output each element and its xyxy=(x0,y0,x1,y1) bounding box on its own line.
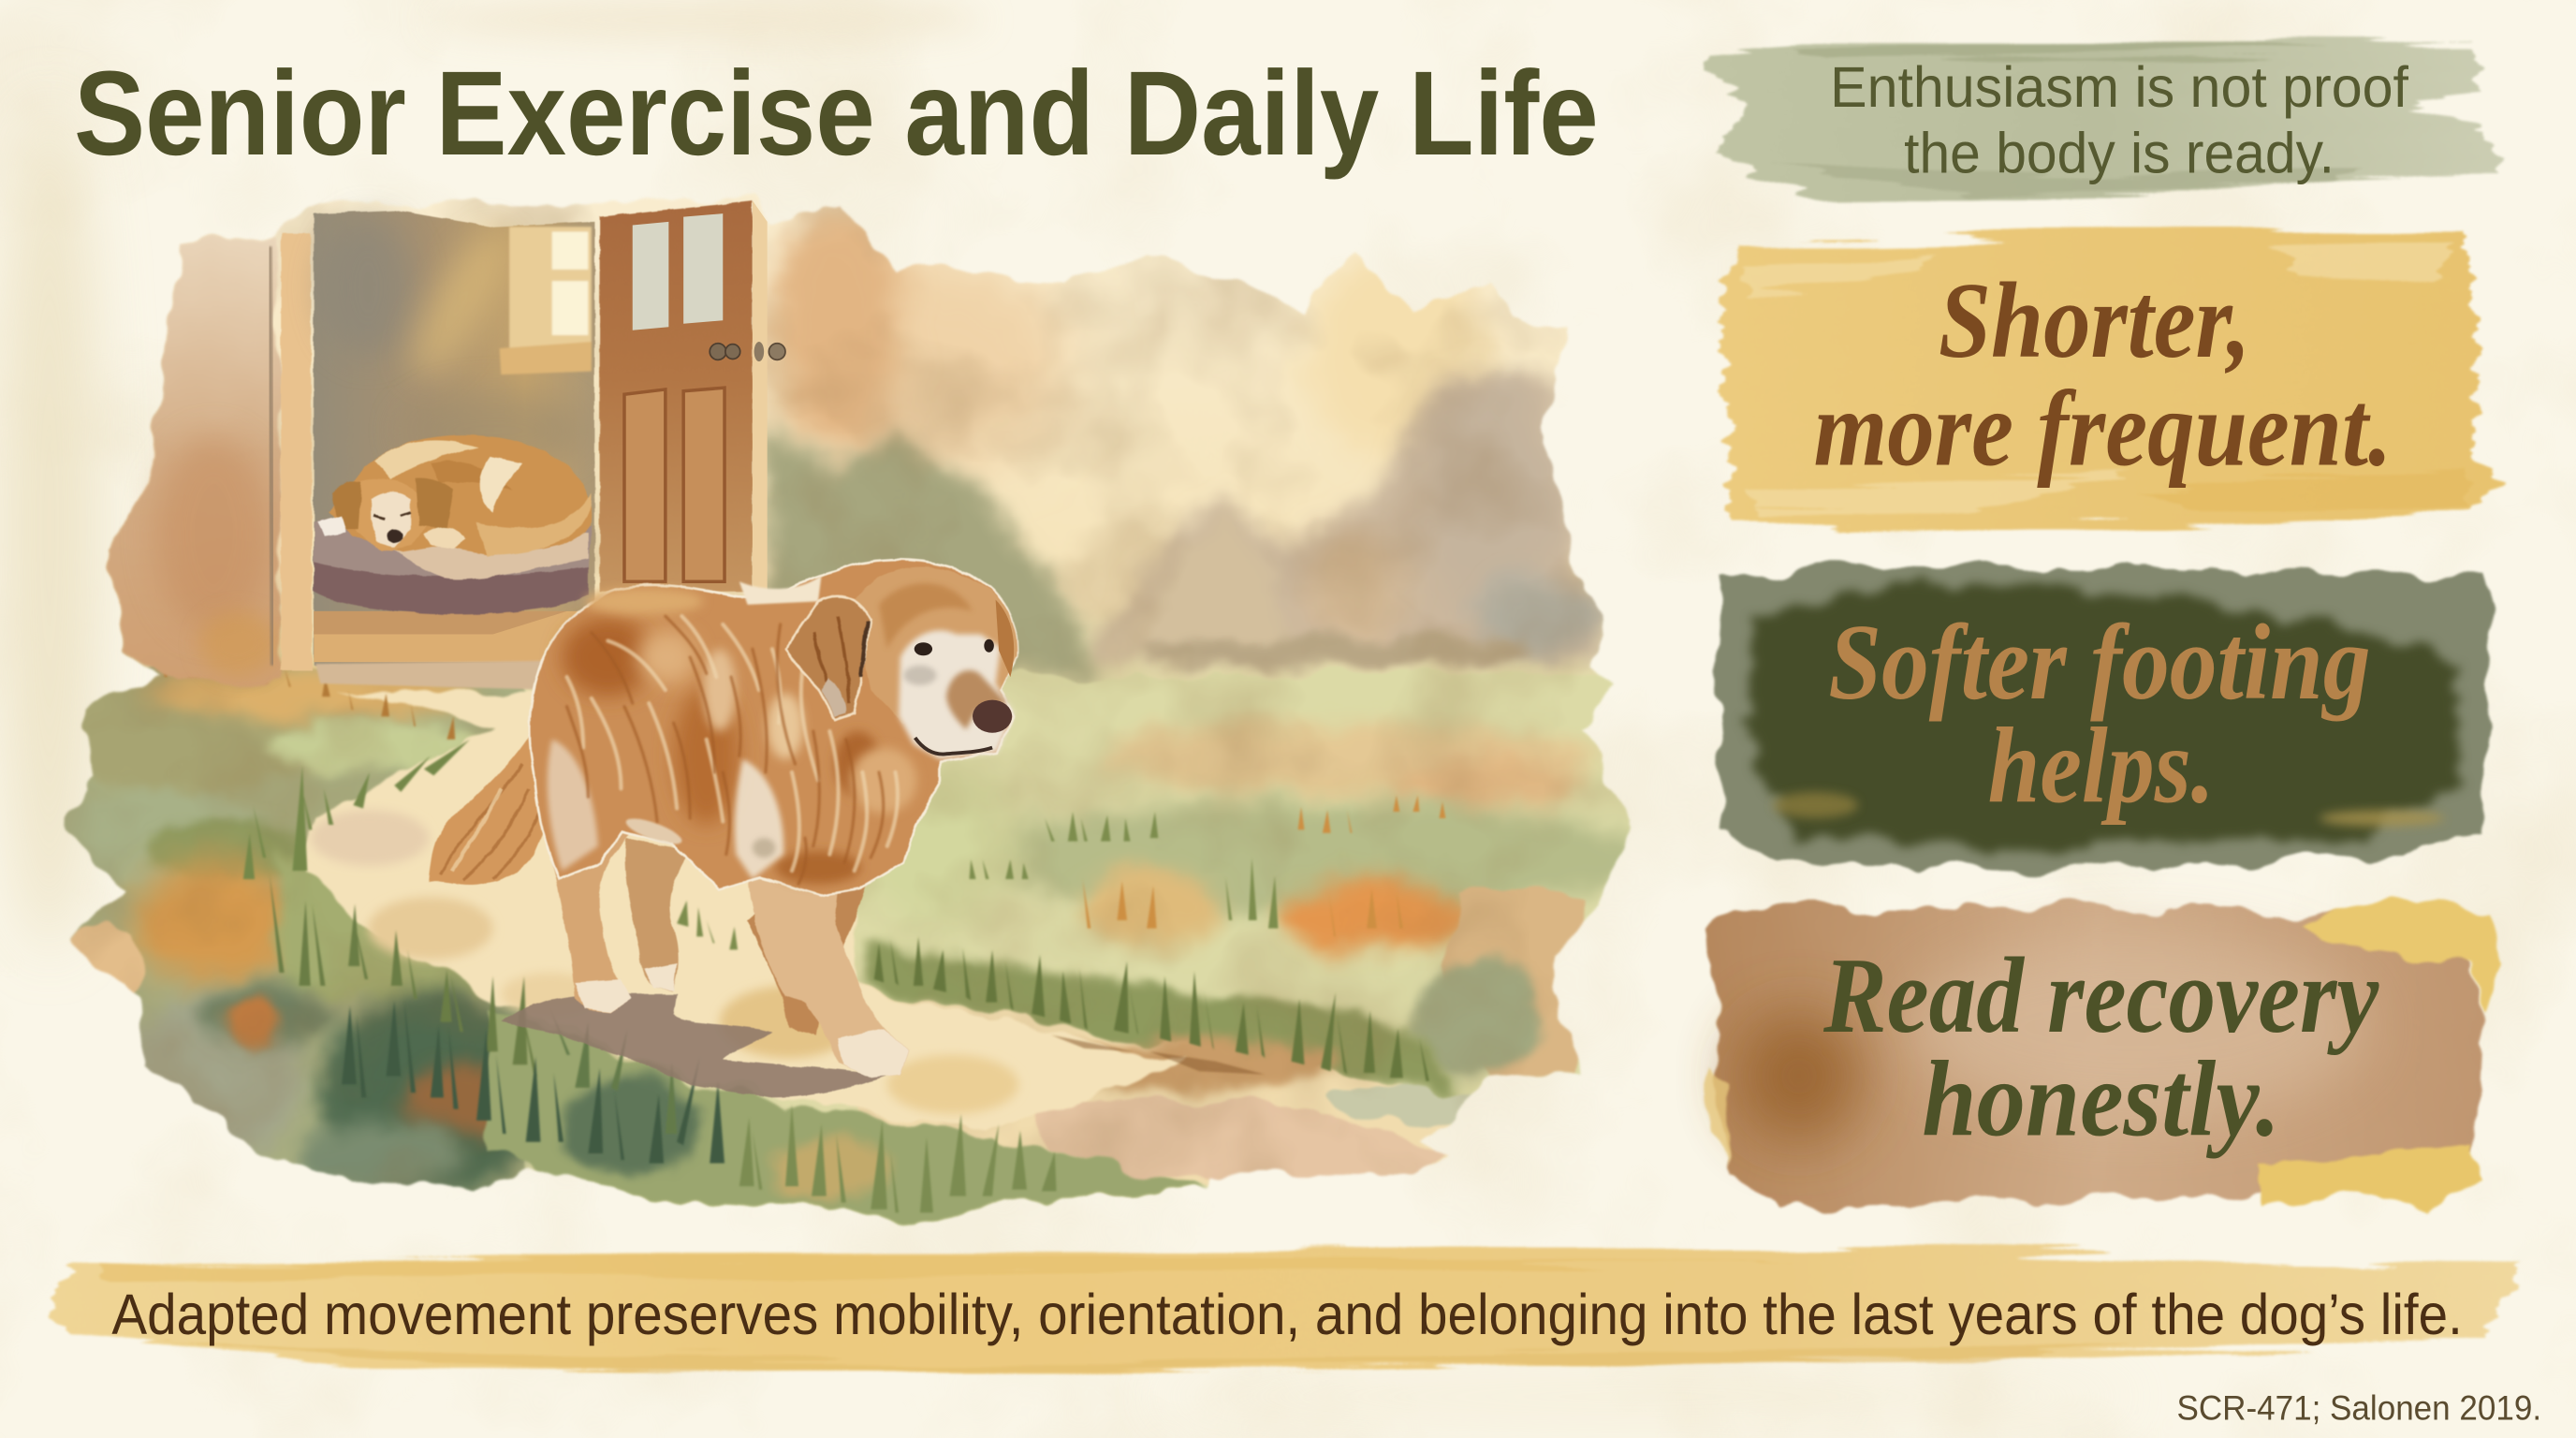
near front leg xyxy=(748,855,909,1077)
ochre wash xyxy=(1721,230,2500,529)
ear xyxy=(785,596,871,720)
title: Senior Exercise and Daily Life xyxy=(74,47,1599,181)
panel: enthusiasm note: the body is ready. xyxy=(1904,121,2334,185)
panel: softer footing helps xyxy=(1717,562,2489,871)
panel: enthusiasm note xyxy=(1701,43,2505,200)
eyes xyxy=(915,642,932,655)
watercolor landscape wash xyxy=(50,181,1651,1232)
room interior xyxy=(314,211,594,666)
green wash xyxy=(1717,562,2489,871)
dark core xyxy=(1745,579,2461,848)
sleeping dog xyxy=(317,435,592,555)
takeaway banner xyxy=(46,1249,2522,1372)
nose xyxy=(973,700,1012,733)
door glass xyxy=(633,213,723,330)
tail xyxy=(429,731,555,885)
hedge xyxy=(764,419,1104,677)
grass blades xyxy=(159,634,1445,1212)
room window xyxy=(500,227,592,374)
sage brush strokes xyxy=(1701,43,2505,200)
ochre brush stroke xyxy=(46,1249,2522,1372)
fur light streaks xyxy=(567,616,898,871)
door knobs xyxy=(710,342,785,361)
door frame xyxy=(281,233,313,670)
pale wash centre xyxy=(1906,936,2365,1117)
panel: read recovery honestly: honestly. xyxy=(1922,1040,2280,1160)
wooden door xyxy=(600,200,785,592)
left bank xyxy=(50,666,526,1208)
paws xyxy=(575,962,909,1078)
text: Shorter, xyxy=(1939,261,2250,381)
dark bloom xyxy=(1736,1010,1862,1142)
body xyxy=(530,560,1017,895)
standing golden retriever xyxy=(429,560,1017,1078)
panel: shorter, more frequent: more frequent. xyxy=(1814,370,2392,490)
cast shadow xyxy=(501,994,887,1097)
text: Read recovery xyxy=(1822,936,2379,1056)
dirt path xyxy=(309,690,1183,1134)
panel: shorter, more frequent xyxy=(1721,230,2500,529)
illustration: senior dog on a soft path xyxy=(50,181,1651,1232)
white face xyxy=(899,630,1014,759)
gold splashes xyxy=(1708,901,2505,1212)
door panels xyxy=(624,388,724,581)
source citation: SCR-471; Salonen 2019. xyxy=(2176,1388,2541,1427)
far rear leg xyxy=(625,838,690,990)
text: Enthusiasm is not proof xyxy=(1830,55,2409,120)
near rear leg xyxy=(539,772,647,1012)
panel: softer footing helps: helps. xyxy=(1988,706,2215,826)
meadow xyxy=(1006,668,1101,691)
head xyxy=(785,566,1017,759)
gold flecks xyxy=(1773,792,2445,827)
right ear edge xyxy=(996,600,1014,677)
floor and threshold xyxy=(314,611,594,690)
brown wash xyxy=(1708,907,2481,1208)
text: Softer footing xyxy=(1828,603,2371,723)
fur colour patches xyxy=(548,575,916,884)
far front leg xyxy=(748,871,871,1035)
dog bed xyxy=(314,516,592,614)
panel: read recovery honestly xyxy=(1708,901,2505,1212)
fur dark streaks xyxy=(567,616,884,884)
mouth xyxy=(915,738,992,755)
hills xyxy=(867,263,1078,476)
tan cheek and snout bridge xyxy=(946,670,1007,729)
house wall left xyxy=(107,233,279,681)
front grass bank xyxy=(485,1005,1212,1219)
